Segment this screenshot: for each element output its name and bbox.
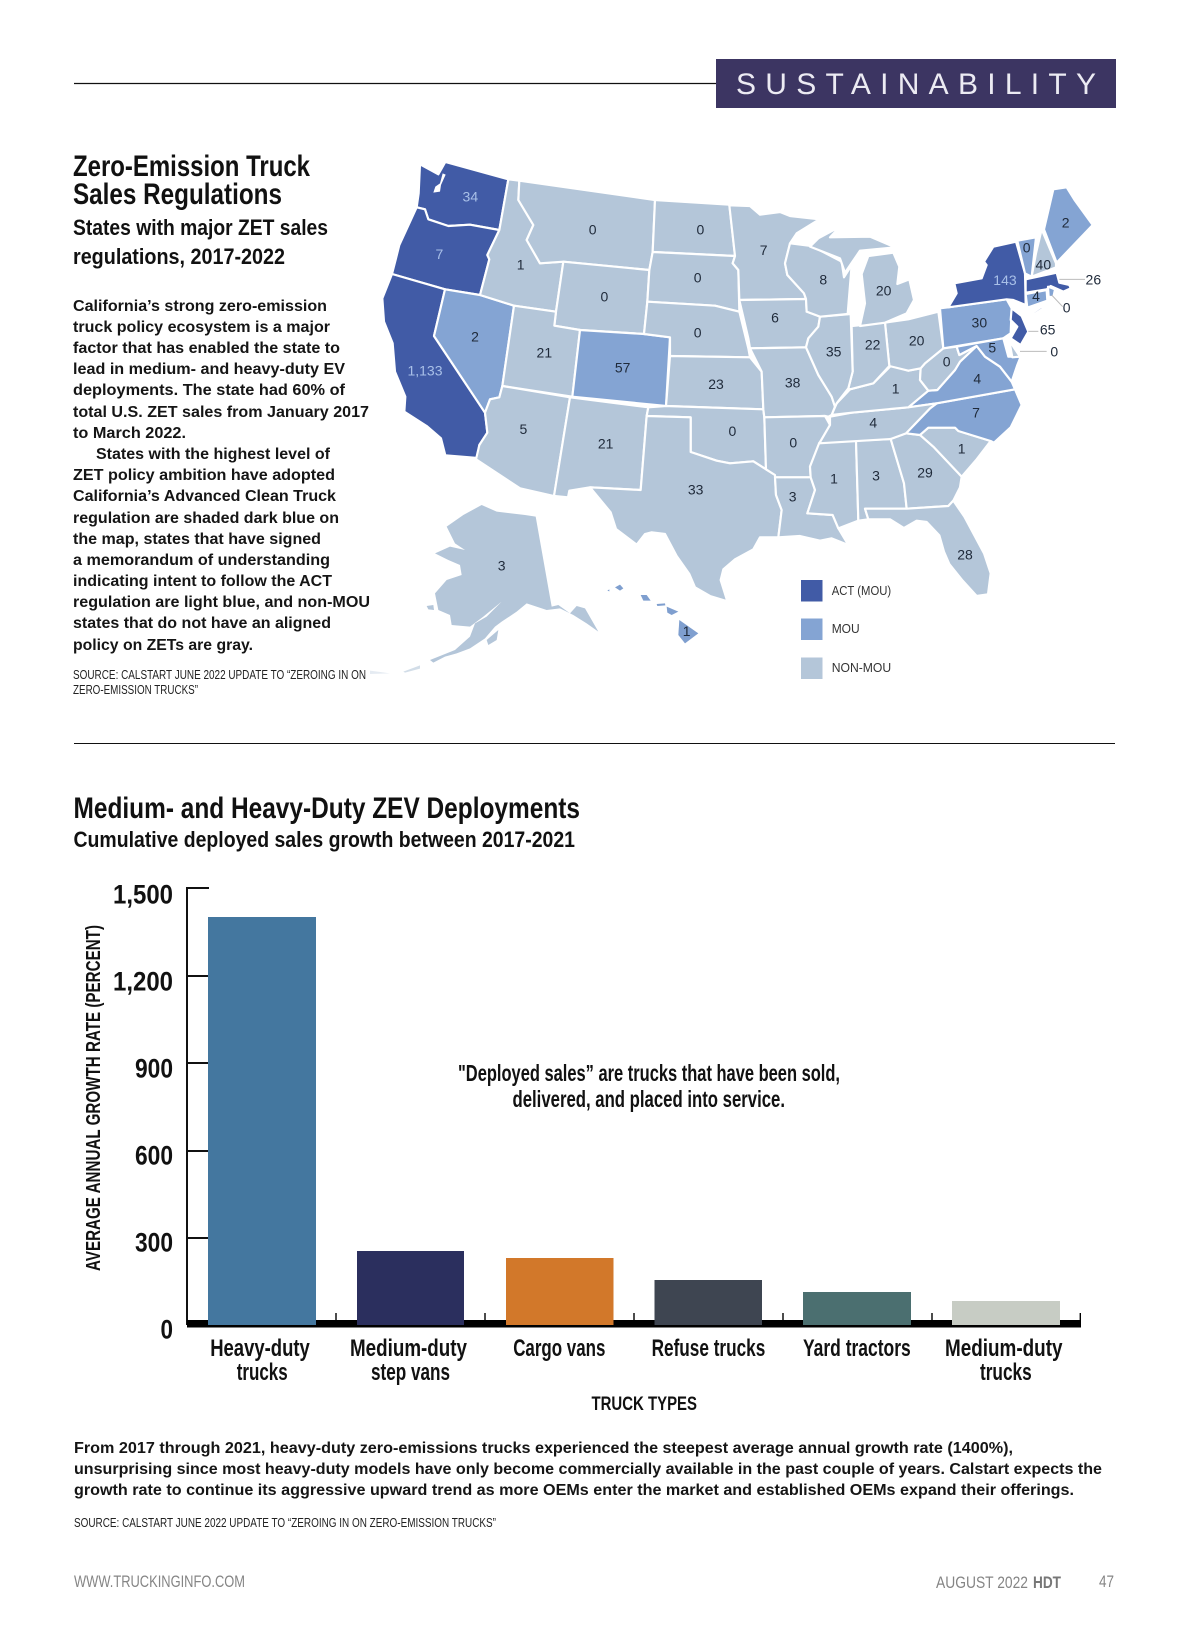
text block: map description: ZET policy ambition have adopted [73, 467, 335, 484]
state: Idaho: 1 [517, 257, 525, 273]
state: Michigan: 20 [876, 283, 892, 299]
state: Florida [865, 501, 991, 596]
state: Utah: 21 [537, 345, 552, 361]
map legend [801, 580, 891, 679]
state: Idaho [480, 179, 563, 312]
text block: map description: States with the highest level of [96, 446, 331, 463]
category labels: Heavy-duty [210, 1335, 310, 1362]
y-axis tick labels: 300 [135, 1228, 173, 1258]
state: Kentucky [832, 365, 928, 415]
category labels: Refuse trucks [652, 1335, 765, 1362]
callout: Delaware value: 0 [1050, 344, 1058, 360]
y-axis title: AVERAGE ANNUAL GROWTH RATE (PERCENT) [83, 925, 105, 1271]
source note: map: ZERO-EMISSION TRUCKS” [73, 682, 198, 697]
state: Georgia [891, 433, 962, 509]
state: Colorado: 57 [615, 359, 631, 375]
state: West Virginia [920, 346, 977, 391]
state: North Carolina [906, 389, 1022, 443]
legend item: NON-MOU: NON-MOU [832, 660, 891, 675]
footer: issue date and publication: AUGUST 2022 [936, 1573, 1028, 1592]
state: Minnesota [729, 205, 819, 300]
text block: map description [73, 298, 370, 654]
text block: map description: regulation are light blue, and non-MOU [73, 594, 370, 611]
y-axis tick labels: 0 [160, 1314, 173, 1344]
heading: zero-emission truck sales regulations: Sales Regulations [73, 178, 282, 211]
callout: Rhode Island value: 0 [1063, 300, 1071, 316]
state: Mississippi: 1 [830, 471, 838, 487]
state: Utah [502, 306, 580, 397]
source note: chart: SOURCE: CALSTART JUNE 2022 UPDATE TO “ZEROING IN ON ZERO-EMISSION TRUCKS” [74, 1515, 496, 1530]
y-axis tick labels: 1,500 [113, 880, 173, 910]
state: Iowa [739, 299, 820, 348]
text block: map description: factor that has enabled the state to [73, 340, 340, 357]
state: California: 1,133 [407, 363, 443, 379]
state: Nevada [434, 289, 514, 413]
category labels: Cargo vans [513, 1335, 605, 1362]
category labels: Yard tractors [803, 1335, 911, 1362]
state: Virginia: 4 [973, 370, 981, 386]
state: Montana: 0 [589, 221, 597, 237]
callout: New Jersey value [1028, 321, 1056, 337]
state: North Dakota: 0 [696, 221, 704, 237]
text block: chart description: growth rate to continue its aggressive upward trend as more OEMs enter the market and established OEMs expand their offerings. [74, 1482, 1074, 1499]
central and eastern states [729, 187, 1101, 596]
text block: chart description [74, 1440, 1102, 1499]
y-axis tick labels: 900 [135, 1054, 173, 1084]
y-axis tick labels: 1,200 [113, 966, 173, 996]
text block: map description: policy on ZETs are gray. [73, 637, 253, 654]
state: Maine [1044, 187, 1093, 263]
state: Indiana: 22 [865, 336, 881, 352]
state: New Mexico [554, 397, 648, 497]
text block: map description: a memorandum of understanding [73, 552, 330, 569]
state: Wyoming [554, 262, 649, 334]
state: New York: 143 [993, 272, 1017, 288]
state: Rhode Island [1048, 287, 1055, 297]
state: Connecticut [1026, 288, 1047, 308]
state: New Mexico: 21 [598, 435, 614, 451]
state: Louisiana: 3 [789, 489, 797, 505]
state: South Dakota [647, 252, 739, 312]
state: Texas: 33 [688, 481, 704, 497]
callout: Massachusetts value [1059, 271, 1101, 287]
state: Ohio [885, 312, 943, 371]
text block: map description: indicating intent to follow the ACT [73, 573, 332, 590]
state: South Carolina [920, 428, 991, 477]
text block: map description: the map, states that have signed [73, 531, 321, 548]
text block: chart description: unsurprising since most heavy-duty models have only become commercially available in the past couple of years. Calstart expects the [74, 1461, 1102, 1478]
heading: medium- and heavy-duty ZEV deployments: Medium- and Heavy-Duty ZEV Deployments [74, 792, 580, 825]
text block: map description: states that do not have an aligned [73, 615, 331, 632]
state: Nebraska [644, 302, 750, 357]
callout: New Jersey value: 65 [1040, 321, 1056, 337]
text block: map description: to March 2022. [73, 425, 186, 442]
state: Oklahoma [647, 406, 766, 469]
state: Kentucky: 1 [892, 380, 900, 396]
text block: chart description: From 2017 through 2021, heavy-duty zero-emissions trucks experienced the steepest average annual growth rate (1400%), [74, 1440, 1013, 1457]
legend item: MOU: MOU [832, 621, 860, 636]
state: Maryland [957, 338, 1021, 382]
bar: cargo vans [506, 1258, 614, 1325]
category labels: trucks [980, 1359, 1032, 1386]
state: Colorado [572, 330, 670, 406]
state: West Virginia: 0 [943, 354, 951, 370]
text block: map description: deployments. The state had 60% of [73, 382, 346, 399]
state: Wisconsin: 8 [819, 271, 827, 287]
state: Alaska [370, 505, 598, 674]
category labels: Medium-duty [945, 1335, 1063, 1362]
state: Texas [590, 416, 782, 601]
state: Indiana [848, 323, 889, 389]
state: Iowa: 6 [771, 310, 779, 326]
category labels: step vans [371, 1359, 450, 1386]
subheading: cumulative deployed sales growth: Cumulative deployed sales growth between 2017-2021 [74, 827, 575, 852]
header banner: sustainability: SUSTAINABILITY [736, 68, 1096, 101]
state: Arkansas: 0 [789, 435, 797, 451]
state: Alaska: 3 [498, 557, 506, 573]
category labels: trucks [237, 1359, 288, 1386]
subheading: states with major ZET sales regulations [73, 215, 328, 269]
state: Vermont [1017, 237, 1036, 277]
y-axis with ticks [187, 888, 209, 1325]
state: New York [948, 242, 1043, 318]
state: Georgia: 29 [917, 465, 933, 481]
bar: heavy-duty trucks [208, 917, 316, 1325]
text block: map description: lead in medium- and heavy-duty EV [73, 361, 345, 378]
state: Wisconsin [785, 243, 852, 317]
state: Washington [417, 162, 508, 230]
state: Maine: 2 [1062, 215, 1070, 231]
y-axis tick labels: 600 [135, 1140, 173, 1170]
bar: medium-duty step vans [357, 1251, 464, 1325]
state: Nevada: 2 [471, 329, 479, 345]
y-axis tick labels [113, 880, 173, 1344]
chart annotation: deployed sales definition: "Deployed sales” are trucks that have been sold, [458, 1060, 840, 1086]
text block: map description: regulation are shaded dark blue on [73, 510, 339, 527]
footer: issue date and publication: HDT [1033, 1573, 1061, 1592]
heading: zero-emission truck sales regulations [73, 150, 310, 211]
state: California [382, 274, 487, 458]
state: South Carolina: 1 [958, 440, 966, 456]
US map of ZET sales by state [370, 162, 1101, 674]
callout: Rhode Island value [1052, 295, 1071, 316]
text block: map description: California’s strong zero-emission [73, 298, 327, 315]
subheading: states with major ZET sales regulations: States with major ZET sales [73, 215, 328, 240]
subheading: states with major ZET sales regulations: regulations, 2017-2022 [73, 244, 285, 269]
bar chart: growth rate by truck type [83, 880, 1081, 1415]
state: Tennessee [819, 403, 937, 443]
state: South Dakota: 0 [694, 269, 702, 285]
callout: Massachusetts value: 26 [1086, 271, 1101, 287]
state: Missouri: 38 [785, 374, 801, 390]
x-axis title: TRUCK TYPES [592, 1394, 697, 1415]
state: Hawaii [607, 585, 698, 643]
state: New Hampshire: 40 [1036, 256, 1051, 272]
state: Tennessee: 4 [869, 415, 877, 431]
state: Vermont: 0 [1023, 239, 1031, 255]
state: Michigan [810, 227, 914, 326]
callout: Delaware value [1020, 344, 1058, 360]
state: Oklahoma: 0 [728, 423, 736, 439]
state: Ohio: 20 [909, 333, 925, 349]
state: New Hampshire [1032, 229, 1056, 277]
state: Louisiana [775, 477, 848, 545]
state: Maryland: 5 [988, 339, 996, 355]
footer: page number: 47 [1099, 1572, 1114, 1591]
footer: website: WWW.TRUCKINGINFO.COM [74, 1572, 245, 1591]
x-axis baseline with ticks [187, 1313, 1081, 1328]
state: Arkansas [764, 416, 830, 477]
state: Mississippi [807, 441, 858, 528]
state: Alabama: 3 [872, 467, 880, 483]
chart annotation: deployed sales definition [458, 1060, 840, 1112]
heading: zero-emission truck sales regulations: Zero-Emission Truck [73, 150, 310, 183]
state: Arizona [476, 386, 570, 496]
state: Montana [518, 181, 655, 270]
state: Massachusetts [1026, 273, 1071, 293]
state: Virginia [908, 346, 1015, 407]
state: Kansas [666, 356, 763, 409]
state: Nebraska: 0 [694, 324, 702, 340]
state: Minnesota: 7 [760, 242, 768, 258]
text block: map description: total U.S. ZET sales from January 2017 [73, 404, 369, 421]
state: North Carolina: 7 [972, 404, 980, 420]
source note: map: SOURCE: CALSTART JUNE 2022 UPDATE TO “ZEROING IN ON [73, 667, 366, 682]
state: Arizona: 5 [519, 421, 527, 437]
state: Oregon [392, 207, 499, 295]
state: Florida: 28 [957, 546, 973, 562]
bar: yard tractors [803, 1292, 911, 1325]
state: Alabama [856, 439, 907, 521]
state: Oregon: 7 [435, 246, 443, 262]
state: Connecticut: 4 [1032, 288, 1040, 304]
legend item: ACT (MOU): ACT (MOU) [832, 583, 891, 598]
bar: medium-duty trucks [952, 1301, 1060, 1325]
state: Hawaii: 1 [683, 623, 691, 639]
state: Delaware [1009, 341, 1020, 357]
chart annotation: deployed sales definition: delivered, and placed into service. [512, 1086, 785, 1112]
category labels: Medium-duty [350, 1335, 468, 1362]
state: Kansas: 23 [708, 376, 724, 392]
state: New Jersey [1011, 308, 1028, 345]
header banner: sustainability [716, 59, 1116, 108]
state: Missouri [750, 347, 835, 417]
state: Illinois: 35 [826, 344, 842, 360]
state: Washington: 34 [463, 189, 478, 205]
source note: map [73, 667, 366, 697]
state: North Dakota [653, 200, 735, 256]
text block: map description: California’s Advanced Clean Truck [73, 488, 336, 505]
state: Pennsylvania [940, 299, 1012, 348]
text block: map description: truck policy ecosystem is a major [73, 319, 330, 336]
state: Wyoming: 0 [600, 289, 608, 305]
bar: refuse trucks [654, 1280, 762, 1325]
state: Illinois [806, 314, 853, 407]
state: Pennsylvania: 30 [972, 314, 987, 330]
category labels [210, 1335, 1063, 1386]
